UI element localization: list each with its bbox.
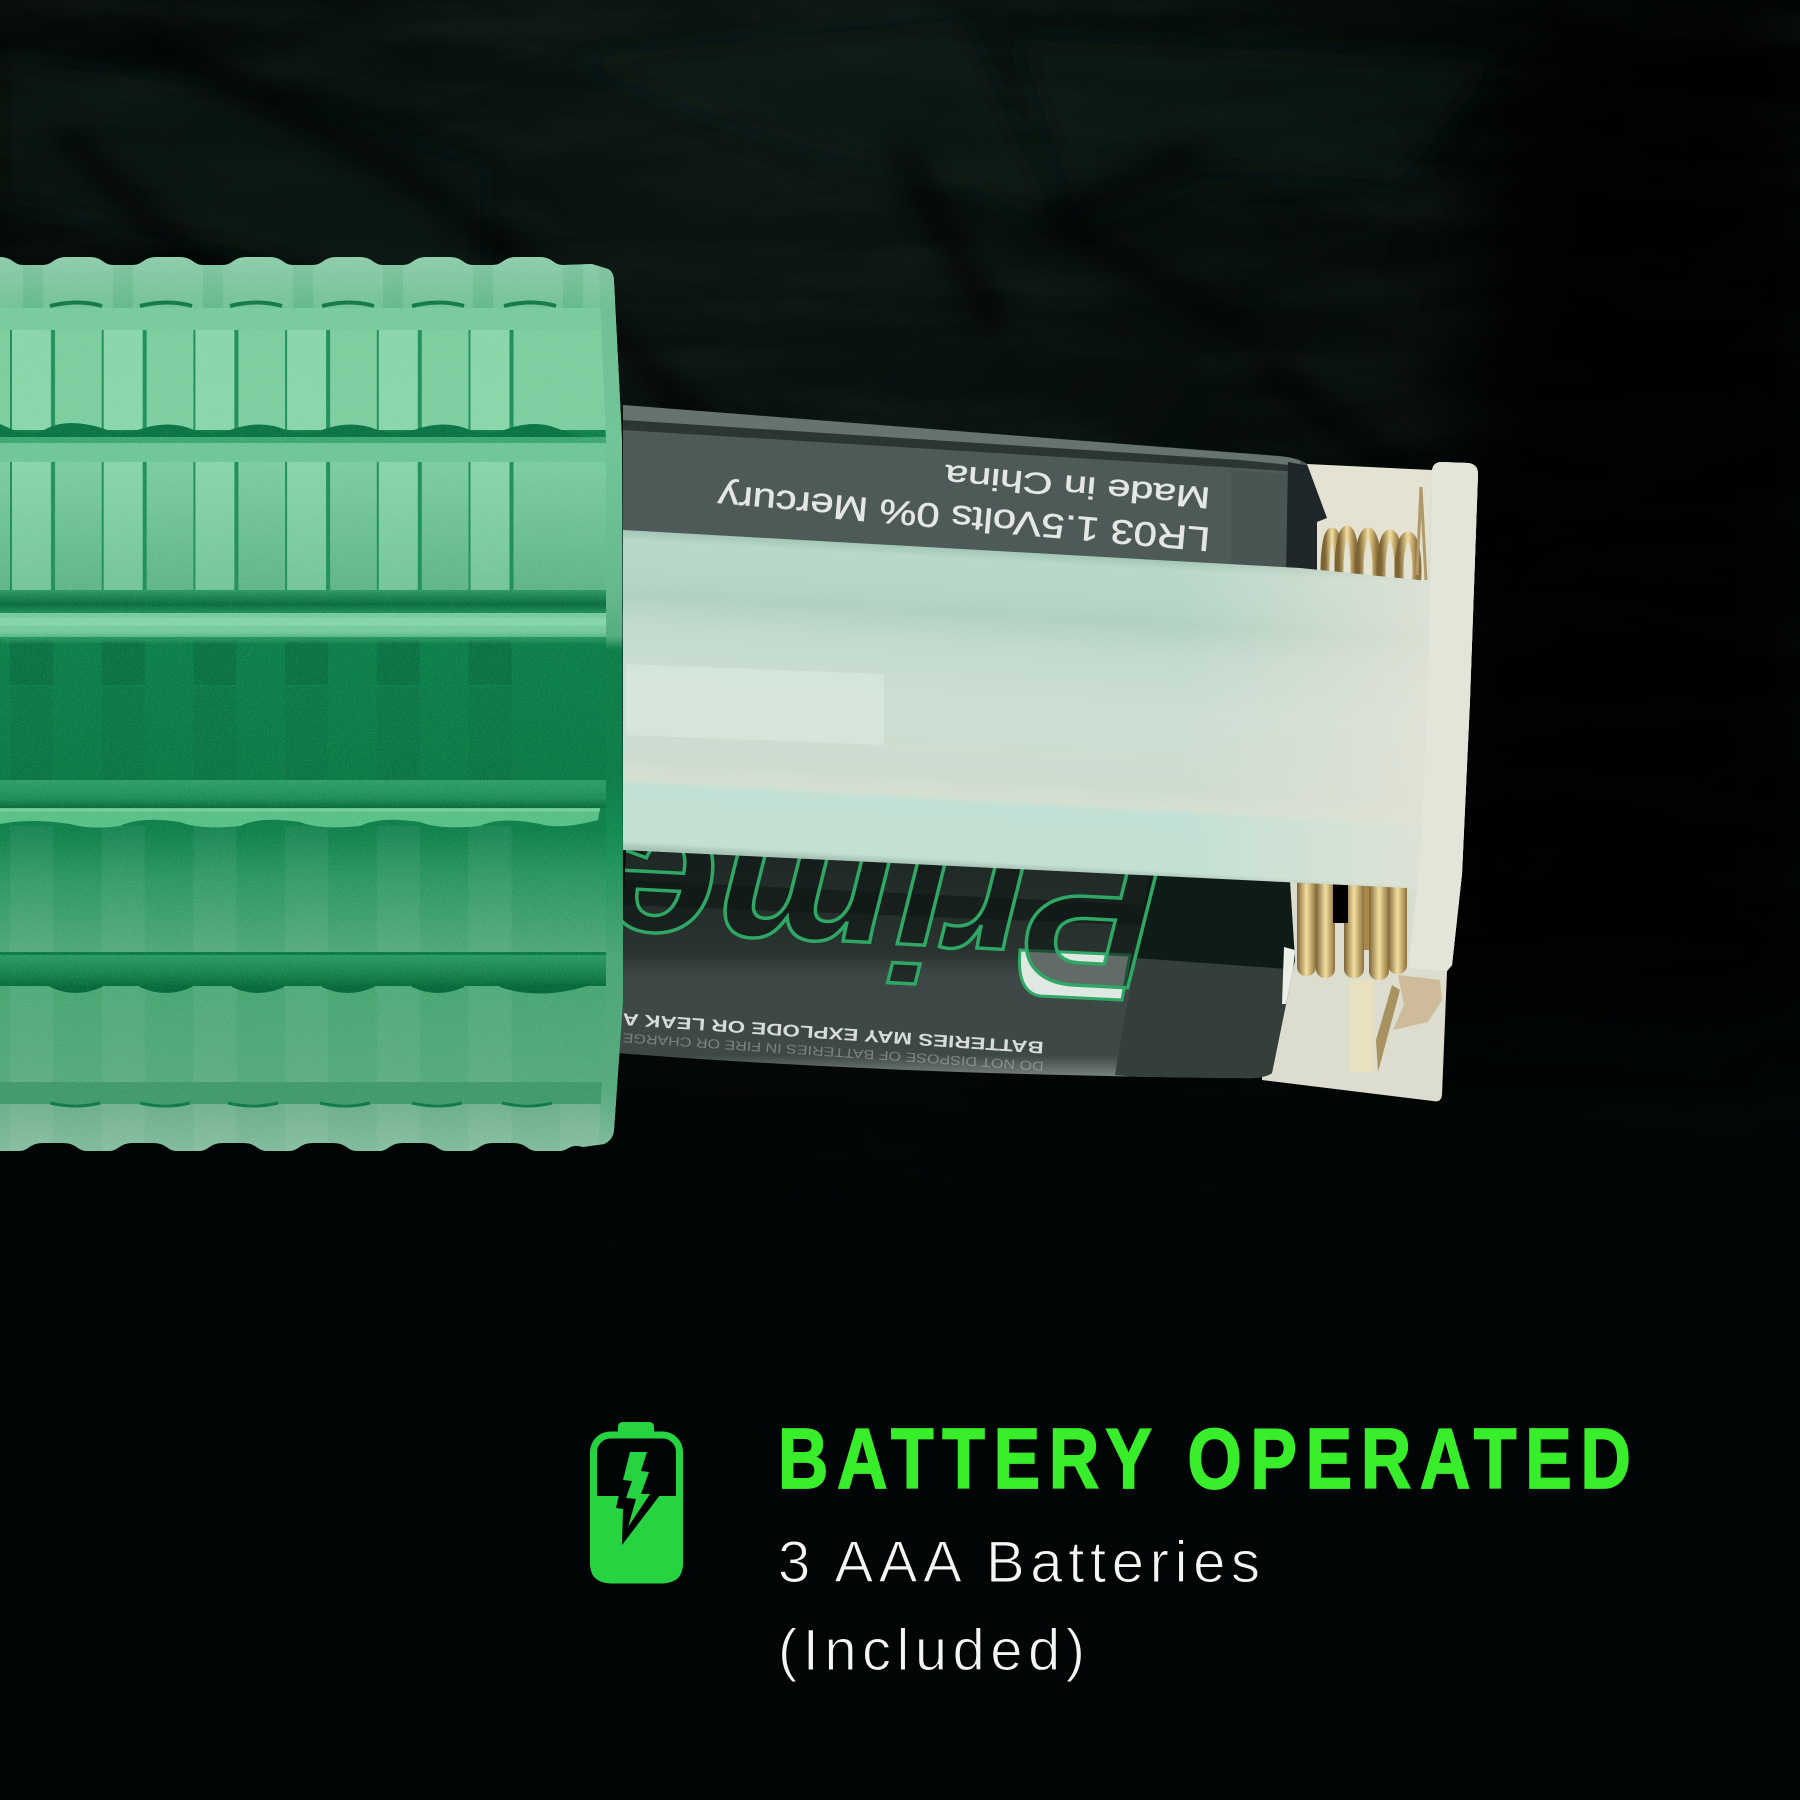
battery warning line: BATTERIES MAY EXPLODE OR LEAK A	[622, 1009, 1044, 1057]
battery holder and batteries	[600, 405, 1478, 1101]
ribbed band 1	[0, 308, 630, 463]
small black mark on spring	[1333, 882, 1348, 923]
body text line 2: (Included)	[778, 1618, 1085, 1683]
top battery	[623, 405, 1327, 580]
bottom spring	[1297, 870, 1442, 1072]
surface grain	[0, 250, 630, 1160]
icon: battery shell	[594, 1435, 680, 1580]
icon: battery cap	[618, 1422, 654, 1436]
heading: battery operated: BATTERY OPERATED	[778, 1413, 1631, 1507]
holder inner panel	[626, 664, 884, 745]
lower mid gradient section	[0, 826, 630, 987]
icon: battery fill level	[590, 1496, 683, 1583]
battery warning faint line: DO NOT DISPOSE OF BATTERIES IN FIRE OR CHARGE	[622, 1030, 1044, 1074]
dark central section	[0, 634, 630, 780]
body end rim	[598, 266, 623, 1145]
top pale section	[0, 257, 616, 308]
battery label: LR03: LR03 1.5Volts 0% Mercury	[716, 477, 1212, 558]
body text line 1: 3 AAA Batteries	[778, 1530, 1260, 1595]
bottom cream holder section	[1260, 880, 1460, 1101]
holder main body	[623, 462, 1478, 971]
tab paper	[1393, 975, 1442, 1030]
background: dark textured surface	[0, 0, 1482, 740]
top spring	[1325, 487, 1426, 610]
lower medium section	[0, 984, 630, 1086]
icon: battery with lightning bolt	[590, 1422, 683, 1583]
white letter highlight	[1019, 950, 1130, 1000]
bottom battery	[620, 850, 1295, 1078]
flashlight green body	[0, 250, 635, 1160]
bottom pale section	[0, 1082, 630, 1154]
holder end cap behind top spring	[1307, 464, 1432, 585]
battery label: Made in China: Made in China	[943, 458, 1212, 514]
ribbed band 2	[0, 462, 630, 639]
icon: bolt cut-out	[616, 1495, 660, 1545]
icon: lightning bolt	[623, 1452, 650, 1527]
ring band lower	[0, 780, 630, 828]
brand lettering: Prime	[600, 780, 1167, 1032]
